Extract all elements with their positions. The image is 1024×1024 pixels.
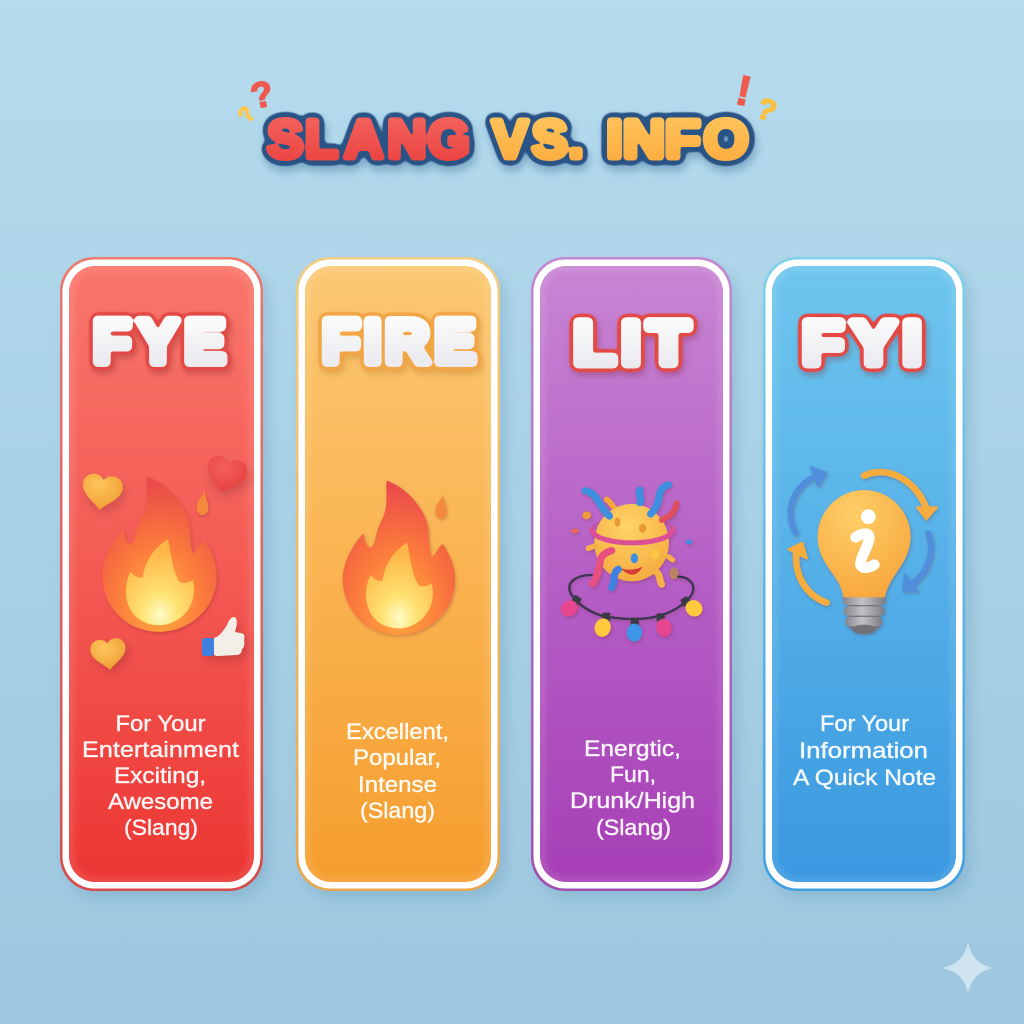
panel: LIT	[531, 257, 738, 898]
ornament: yellow question mark right: ?	[752, 92, 781, 129]
icon: red heart	[202, 454, 250, 497]
ornament: yellow question mark left: ?	[232, 101, 260, 128]
description: LIT: Energtic,	[584, 736, 681, 761]
description: FYE: Awesome	[108, 789, 213, 814]
ornament: red question mark: ?	[247, 72, 277, 117]
description: FYE: Exciting,	[114, 763, 206, 788]
description: FIRE: (Slang)	[360, 798, 435, 823]
description: FIRE: Popular,	[353, 745, 441, 770]
title: Slang vs. Info	[232, 66, 781, 170]
description: LIT: (Slang)	[596, 815, 671, 840]
description: FYE: For Your	[116, 711, 206, 736]
panel: FIRE	[296, 257, 506, 898]
heading: FYE: FYE	[93, 308, 225, 376]
description: FYI: A Quick Note	[793, 765, 936, 790]
title word: SLANG: SLANG	[267, 110, 470, 170]
description: LIT: Drunk/High	[570, 788, 695, 813]
description: FYI	[793, 711, 936, 790]
description: FYE: (Slang)	[124, 815, 198, 840]
icon: flame	[343, 481, 455, 635]
description: FYI: For Your	[820, 711, 909, 736]
title word: VS.: VS.	[492, 110, 584, 170]
ornament: red exclamation mark: !	[732, 66, 756, 115]
icon: flame	[102, 477, 217, 632]
icon: party ball with string lights	[558, 485, 705, 642]
heading: FYI: FYI	[802, 309, 921, 377]
description: LIT	[570, 736, 695, 840]
icon: thumbs up	[202, 617, 245, 656]
panel: FYI	[763, 257, 971, 898]
description: FYE: Entertainment	[82, 737, 239, 762]
description: FIRE: Intense	[358, 772, 437, 797]
heading: LIT: LIT	[574, 308, 689, 377]
description: FIRE: Excellent,	[346, 719, 449, 744]
icon: sparkle watermark	[942, 942, 993, 993]
description: FIRE	[346, 719, 449, 823]
title word: INFO: INFO	[606, 108, 749, 169]
description: FYI: Information	[799, 738, 928, 763]
icon: light bulb with info mark and cycle arrows	[788, 467, 937, 634]
description: FYE	[82, 711, 239, 840]
icon: orange heart bottom	[89, 637, 128, 672]
description: LIT: Fun,	[610, 762, 656, 787]
panel: FYE	[60, 257, 269, 898]
heading: FIRE: FIRE	[322, 308, 475, 376]
icon: orange heart top left	[80, 472, 124, 513]
